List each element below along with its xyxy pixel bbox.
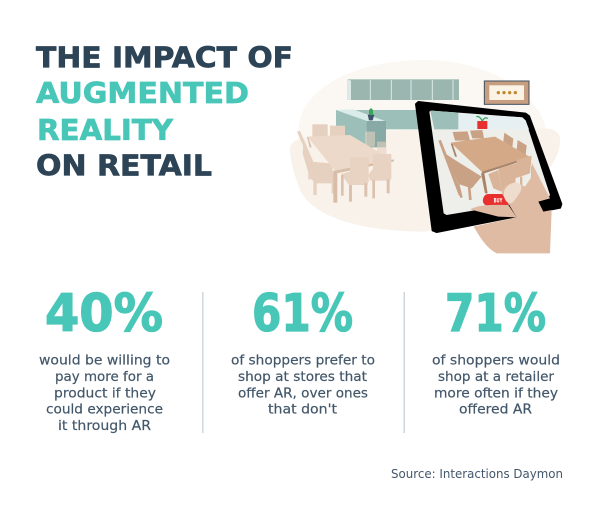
title [36,42,293,182]
buy button: BUY [494,197,503,204]
stat: 40% [39,284,170,434]
divider right [404,292,405,433]
tablet [416,102,562,232]
stat: 61%: of shoppers prefer to [231,354,375,368]
divider left [202,292,204,433]
stat: 71% [432,284,560,418]
stat: 71%: 71% [445,284,546,344]
potted plant on counter [368,108,374,120]
stat: 71%: more often if they [434,386,558,402]
framed picture [484,81,529,104]
stat: 71%: shop at a retailer [438,370,555,385]
source note: Source: Interactions Daymon [391,467,563,481]
stat: 61%: offer AR, over ones [238,386,368,402]
stat: 61%: shop at stores that [238,370,367,385]
title: AUGMENTED [36,77,249,110]
background blob [290,60,560,232]
stat: 71%: of shoppers would [432,354,560,368]
stat: 61%: 61% [252,284,353,344]
stat: 40%: pay more for a [55,370,154,385]
title: REALITY [37,114,173,147]
stat: 40%: it through AR [58,419,151,434]
stat: 71%: offered AR [459,402,532,418]
tablet screen [429,111,550,215]
hand tapping the screen [470,163,552,253]
stat: 61%: that don't [268,402,337,418]
title: ON RETAIL [36,150,212,182]
wall cabinets [347,79,459,100]
stat: 40%: product if they [54,386,156,402]
stat: 40%: 40% [45,284,163,344]
illustration: augmented reality tablet showing a dining room [290,60,562,253]
dining table and chairs [297,124,394,203]
kitchen counter [336,109,458,147]
stat: 40%: would be willing to [39,354,170,368]
stat: 61% [231,284,375,418]
title: THE IMPACT OF [36,42,293,74]
stat: 40%: could experience [46,402,163,418]
